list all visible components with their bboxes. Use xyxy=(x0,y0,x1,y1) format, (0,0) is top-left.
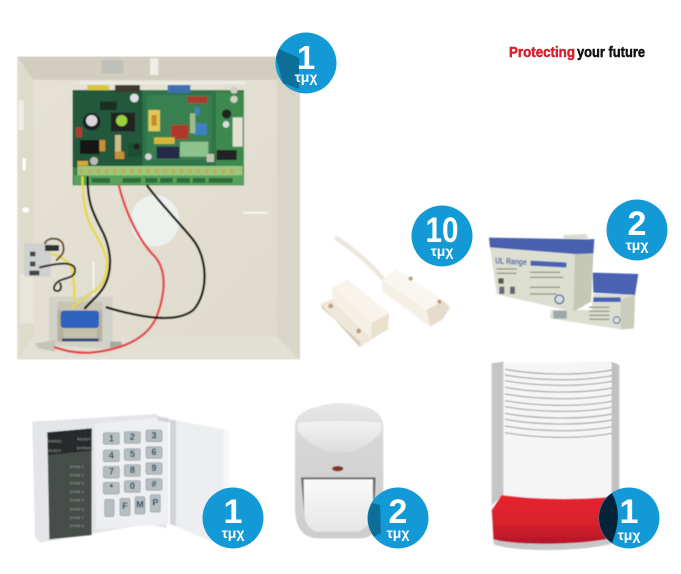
keys: 9 xyxy=(151,463,156,473)
badge: 10 τμχ door contacts: 10 xyxy=(426,211,458,250)
LCD indicator panel: ZONE 2 xyxy=(69,472,85,477)
LCD indicator panel: ZONE 4 xyxy=(69,489,85,494)
badge: 2 τμχ motion detector xyxy=(368,488,428,548)
cable xyxy=(335,237,384,280)
badge: 1 τμχ siren: τμχ xyxy=(618,527,640,543)
terminal strip xyxy=(77,166,243,176)
badge: 1 τμχ keypad xyxy=(202,488,264,548)
LCD indicator panel: ZONE 8 xyxy=(69,523,85,528)
detector housing xyxy=(295,403,383,538)
keys xyxy=(103,430,162,517)
keypad body xyxy=(32,414,168,543)
LCD indicator panel: ZONE 5 xyxy=(69,498,85,503)
knockout disc xyxy=(131,195,179,246)
hinged lid xyxy=(157,417,228,541)
badge: 2 τμχ batteries: 2 xyxy=(628,205,646,243)
LCD indicator panel: ZONE 1 xyxy=(69,464,85,469)
tagline: Protecting your future: Protecting xyxy=(509,44,575,61)
siren housing xyxy=(492,362,619,547)
LCD indicator panel: BYPASS xyxy=(77,445,93,450)
louvres xyxy=(505,369,612,437)
badge: 1 τμχ keypad: 1 xyxy=(224,493,242,531)
lens slot xyxy=(301,477,376,515)
cabinet enclosure xyxy=(17,57,300,359)
control panel cabinet with circuit board xyxy=(17,57,300,359)
batteries xyxy=(489,234,638,329)
LCD indicator panel: ZONE 6 xyxy=(69,506,85,511)
badge: 10 τμχ door contacts: τμχ xyxy=(431,243,453,259)
base shadow xyxy=(493,535,619,550)
red strobe lens xyxy=(492,495,619,544)
keys: 4 xyxy=(109,450,114,460)
keys: F xyxy=(122,501,128,511)
keys: 1 xyxy=(109,433,114,443)
detector hood xyxy=(298,421,382,453)
LCD indicator panel xyxy=(47,428,93,539)
keys: 2 xyxy=(130,432,135,442)
badge: 10 τμχ door contacts xyxy=(412,206,472,266)
badge: 1 τμχ siren xyxy=(598,488,660,548)
wiring xyxy=(40,177,205,353)
large battery xyxy=(489,234,594,319)
badge: 1 τμχ keypad: τμχ xyxy=(222,525,244,541)
badge: 1 τμχ siren: 1 xyxy=(620,493,638,531)
transformer xyxy=(35,297,122,352)
keys: 3 xyxy=(151,430,156,440)
LED badge xyxy=(332,466,343,471)
LCD indicator panel: ZONE 3 xyxy=(69,480,85,485)
large battery: UL Range xyxy=(495,255,527,267)
tagline: Protecting your future xyxy=(509,44,645,61)
circuit board xyxy=(73,81,246,185)
mains terminal block xyxy=(24,243,59,277)
badge: 2 τμχ motion detector: τμχ xyxy=(387,525,409,541)
lens window xyxy=(304,479,373,532)
keys: 7 xyxy=(109,467,114,477)
motion detector xyxy=(295,403,383,538)
keypad xyxy=(32,414,228,543)
magnet xyxy=(321,279,390,347)
keys: M xyxy=(136,499,144,509)
badge: 1 τμχ control panel: 1 xyxy=(297,39,315,76)
badge: 2 τμχ batteries xyxy=(606,200,668,260)
magnetic door contact xyxy=(321,237,450,347)
small battery xyxy=(550,273,638,329)
tagline: Protecting your future: your future xyxy=(577,44,645,61)
keys: 0 xyxy=(130,481,135,491)
keys: 5 xyxy=(130,449,135,459)
badge: 2 τμχ motion detector: 2 xyxy=(389,493,407,531)
badge: 1 τμχ control panel xyxy=(276,32,336,94)
LCD indicator panel: ARMED xyxy=(47,439,62,444)
LCD indicator panel: READY xyxy=(47,448,62,453)
keys: * xyxy=(110,483,114,493)
keys: 8 xyxy=(130,465,135,475)
keys: # xyxy=(151,479,156,489)
keys: 6 xyxy=(151,447,156,457)
LCD indicator panel: READY xyxy=(77,437,91,442)
outdoor siren xyxy=(492,362,619,550)
LCD indicator panel: ZONE 7 xyxy=(69,515,85,520)
key plate xyxy=(95,417,168,529)
badge: 2 τμχ batteries: τμχ xyxy=(626,237,648,253)
badge: 1 τμχ control panel: τμχ xyxy=(295,69,317,85)
reed switch xyxy=(382,269,450,327)
keys: P xyxy=(152,497,158,507)
